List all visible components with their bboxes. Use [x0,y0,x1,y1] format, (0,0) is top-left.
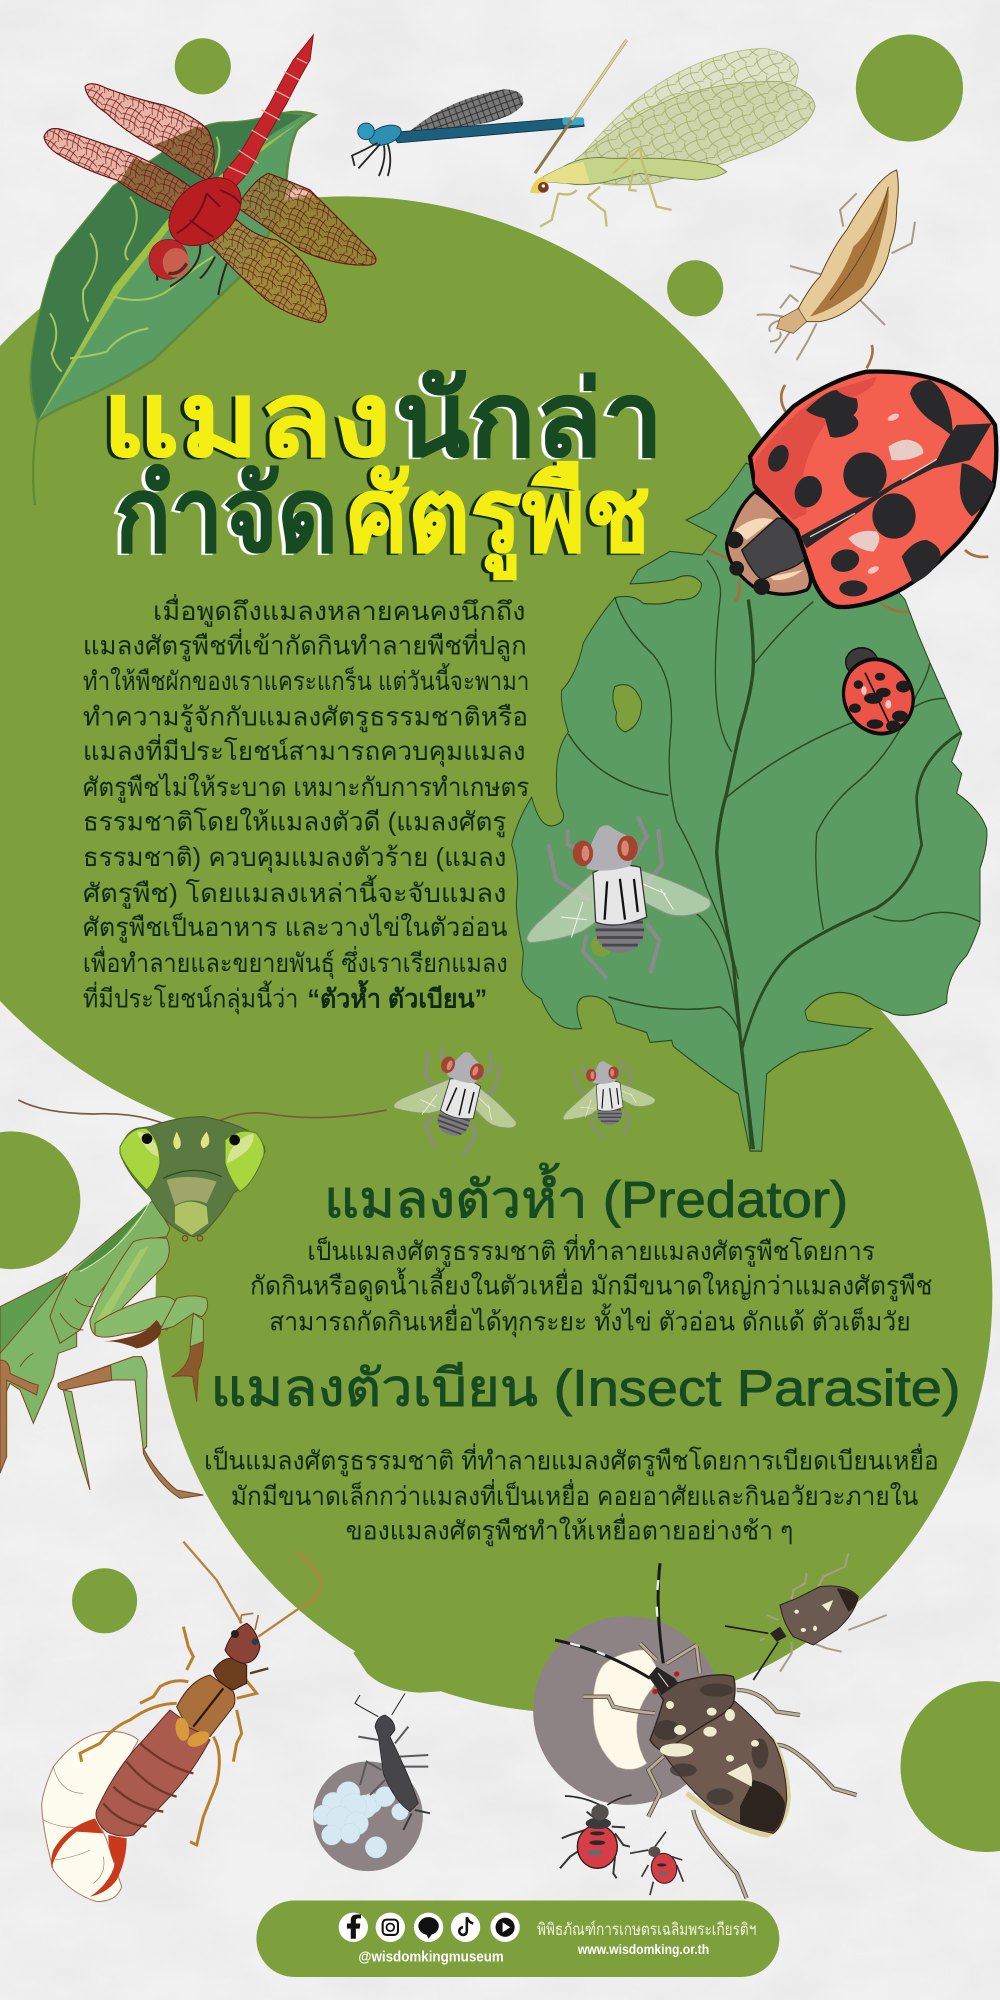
footer pill [256,1901,779,1977]
text block: introduction: ศัตรูพืช) โดยแมลงเหล่านี้จะจับแมลง [83,875,506,909]
heading: title: ศัตรูพืช [347,457,651,580]
leaf bite hole [613,685,642,732]
icon: lacewing larva [757,170,915,360]
icon: large ladybug [708,345,996,612]
green blob shapes [0,196,992,1713]
text block: introduction: ทำความรู้จักกับแมลงศัตรูธรรมชาติหรือ [83,704,528,733]
text block: introduction: ธรรมชาติโดยให้แมลงตัวดี (แมลงศัตรู [83,807,506,837]
footer pill: พิพิธภัณฑ์การเกษตรเฉลิมพระเกียรติฯ [537,1920,756,1939]
icon: white larva [593,1650,660,1769]
text block: parasite description [204,1443,939,1547]
icon: red nymph large [560,1795,632,1878]
heading: title: กำจัด [115,457,338,574]
text block: introduction: เพื่อทำลายและขยายพันธุ์ ซึ่งเราเรียกแมลง [83,946,508,979]
icon: praying mantis [0,1100,387,1498]
icon: red nymph small [630,1832,683,1895]
icon: damselfly [352,89,584,176]
text block: introduction: ธรรมชาติ) ควบคุมแมลงตัวร้าย (แมลง [83,844,506,873]
icon: fly large [527,816,711,978]
text block: introduction: ทำให้พืชผักของเราแคระแกร็น แต่วันนี้จะพามา [83,663,529,696]
text block: introduction: แมลงศัตรูพืชที่เข้ากัดกินทำลายพืชที่ปลูก [83,628,527,661]
icon: small dark earwig with eggs [313,1693,430,1858]
heading: title [102,361,663,580]
heading: predator: แมลงตัวห้ำ (Predator) [324,1163,848,1228]
icon: fly medium [385,1029,536,1171]
icon: green lacewing [530,40,815,227]
leaf veins [568,560,980,1149]
icon: earwig with larva [42,1542,322,1902]
text block: predator description: กัดกินหรือดูดน้ำเลี้ยงในตัวเหยื่อ มักมีขนาดใหญ่กว่าแมลงศัตรูพืช [250,1268,932,1302]
text block: introduction: ศัตรูพืชไม่ให้ระบาด เหมาะกับการทำเกษตร [83,773,529,803]
icon: fly small [563,1057,655,1138]
icon: red dragonfly [44,35,376,323]
icon: plant leaf with veins [512,463,987,1151]
text block: predator description [250,1234,932,1337]
text block: parasite description: เป็นแมลงศัตรูธรรมชาติ ที่ทำลายแมลงศัตรูพืชโดยการเบียดเบียนเหยื่อ [204,1443,939,1476]
text block: parasite description: ของแมลงศัตรูพืชทำให้เหยื่อตายอย่างช้า ๆ [346,1514,793,1547]
text block: introduction [83,594,529,1015]
grey circles behind insects [313,1616,722,1871]
icon: leaf under dragonfly [31,112,315,505]
text block: parasite description: มักมีขนาดเล็กกว่าแมลงที่เป็นเหยื่อ คอยอาศัยและกินอวัยวะภายใน [231,1479,918,1511]
heading: title: นักล่า [395,361,663,478]
text block: introduction: แมลงที่มีประโยชน์สามารถควบคุมแมลง [83,734,526,767]
social icons [339,1913,520,1942]
footer pill: www.wisdomking.or.th [577,1941,709,1957]
icon: small stink bug [725,1553,887,1680]
text block: introduction: ศัตรูพืชเป็นอาหาร และวางไข่ในตัวอ่อน [83,912,508,943]
text block: introduction: “ตัวห้ำ ตัวเบียน” [307,980,487,1014]
icon: large stink bug [555,1563,857,1898]
text block: predator description: เป็นแมลงศัตรูธรรมชาติ ที่ทำลายแมลงศัตรูพืชโดยการ [307,1234,875,1267]
heading: title: แมลง [102,361,392,478]
icon: small ladybug [835,648,922,745]
text block: introduction: เมื่อพูดถึงแมลงหลายคนคงนึกถึง [153,594,526,627]
text block: predator description: สามารถกัดกินเหยื่อได้ทุกระยะ ทั้งไข่ ตัวอ่อน ดักแด้ ตัวเต็มวัย [269,1303,911,1337]
text block: introduction: ที่มีประโยชน์กลุ่มนี้ว่า [83,981,298,1015]
footer pill: @wisdomkingmuseum [358,1950,504,1966]
heading: insect parasite: แมลงตัวเบียน (Insect Parasite) [210,1360,960,1417]
